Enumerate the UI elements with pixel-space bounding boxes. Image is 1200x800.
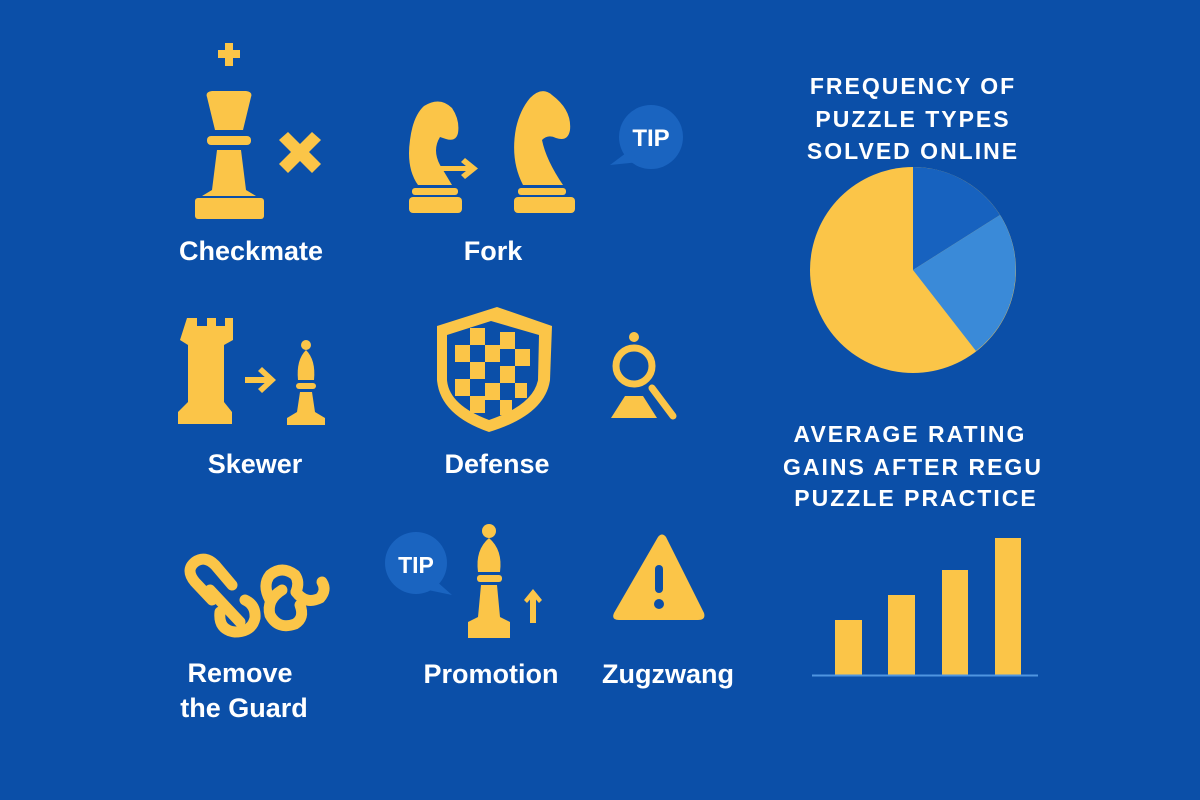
label: Promotion: Promotion <box>424 659 558 689</box>
label: Zugzwang: Zugzwang <box>602 659 734 689</box>
heading: bar chart title: GAINS AFTER REGU <box>783 454 1043 480</box>
icon: warning triangle <box>613 534 704 620</box>
label: Skewer: Skewer <box>208 449 303 479</box>
label: Fork: Fork <box>464 236 523 266</box>
icon: promotion bishop with up arrow <box>468 524 542 638</box>
heading: pie chart title: FREQUENCY OF <box>810 73 1016 99</box>
heading: bar chart title <box>783 421 1043 511</box>
callout: TIP bubble (fork): TIP <box>632 125 670 152</box>
callout: TIP bubble (fork) <box>610 105 683 169</box>
label: Defense: Defense <box>444 449 550 479</box>
icon: pawn with magnifier <box>611 332 673 418</box>
heading: bar chart title: AVERAGE RATING <box>794 421 1026 447</box>
label: Remove the Guard: Remove <box>187 658 293 688</box>
icon: checkmate king with x <box>195 43 321 219</box>
heading: bar chart title: PUZZLE PRACTICE <box>794 485 1038 511</box>
callout: TIP bubble (promotion): TIP <box>398 552 434 578</box>
icon: skewer rook arrow bishop <box>178 318 325 425</box>
bar chart <box>812 538 1038 676</box>
label: Checkmate: Checkmate <box>179 236 323 266</box>
icon: broken chain links <box>190 559 324 632</box>
heading: pie chart title: PUZZLE TYPES <box>815 106 1011 132</box>
heading: pie chart title: SOLVED ONLINE <box>807 138 1019 164</box>
icon: fork knights with arrow <box>409 91 575 213</box>
heading: pie chart title <box>807 73 1019 164</box>
label: Remove the Guard <box>180 658 308 723</box>
label: Remove the Guard: the Guard <box>180 693 308 723</box>
icon: defense shield <box>437 307 552 432</box>
pie chart <box>810 167 1016 373</box>
callout: TIP bubble (promotion) <box>385 532 452 595</box>
